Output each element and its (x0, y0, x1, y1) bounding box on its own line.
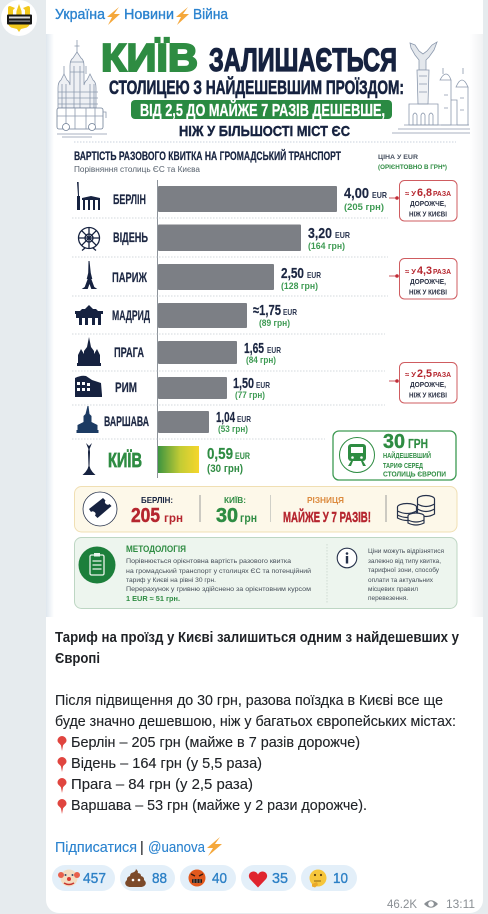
post headline (55, 630, 459, 667)
illustration: church and bus (57, 40, 107, 137)
callout: cheapest fare: НАЙДЕШЕВШИЙ (383, 451, 431, 460)
callout: 6.8 times: РАЗА (433, 189, 452, 198)
chart legend: (ОРІЄНТОВНО В ГРН*) (378, 165, 447, 171)
row: Rome: РИМ (115, 379, 137, 395)
reaction: clown 457 (52, 865, 115, 891)
row: Paris: ПАРИЖ (112, 269, 147, 285)
info note (368, 547, 444, 602)
title: Kyiv: КИЇВ (101, 37, 198, 80)
row: Madrid: EUR (283, 307, 297, 317)
info note: перевезення. (368, 595, 408, 602)
row: Berlin: (205 грн) (344, 202, 384, 213)
callout: 6.8 times: ДОРОЖЧЕ, (410, 199, 446, 208)
row: Prague (77, 337, 281, 366)
callout: cheapest fare: СТОЛИЦЬ ЄВРОПИ (383, 470, 446, 478)
panel: comparison: грн (164, 511, 183, 525)
panel: methodology (74, 538, 457, 608)
row: Kyiv: КИЇВ (108, 449, 142, 472)
callout: 2.5 times (389, 362, 457, 403)
channel name (55, 7, 229, 25)
row: Madrid (75, 303, 297, 329)
row: Vienna: (164 грн) (308, 241, 345, 252)
illustration: Kyiv monument and cathedral (392, 42, 470, 133)
row: Kyiv (82, 443, 250, 475)
row: Prague: 1,65 (244, 341, 264, 357)
row: Berlin: БЕРЛІН (113, 191, 146, 207)
callout: 4.3 times: НІЖ У КИЄВІ (409, 288, 447, 296)
post headline: Європі (55, 651, 100, 667)
title: remains: ЗАЛИШАЄТЬСЯ (209, 42, 397, 78)
callout: 4.3 times: 4,3 (417, 265, 432, 277)
callout: 4.3 times: ДОРОЖЧЕ, (410, 277, 446, 286)
methodology text: Порівнюється орієнтовна вартість разового квитка (126, 557, 291, 565)
reaction: heart 35: 35 (272, 871, 288, 887)
post headline: Тариф на проїзд у Києві залишиться одним з найдешевших у (55, 630, 459, 646)
row: Prague: ПРАГА (114, 344, 144, 360)
icon: ticket (83, 492, 117, 526)
green headline pill: ВІД 2,5 ДО МАЙЖЕ 7 РАЗІВ ДЕШЕВШЕ, (140, 99, 385, 120)
callout: 6.8 times (389, 180, 457, 221)
row: Vienna (78, 224, 350, 252)
row: Vienna: EUR (335, 230, 350, 240)
callout: 4.3 times: РАЗА (433, 267, 452, 276)
reaction: poop 88: 88 (152, 871, 167, 887)
row: Warsaw: EUR (237, 414, 251, 424)
row: Warsaw: ВАРШАВА (104, 413, 149, 429)
row: Madrid: (89 грн) (259, 318, 290, 329)
row: Rome (75, 376, 270, 401)
info note: тарифної зони, способу (368, 566, 440, 574)
list item: Prague: Прага – 84 грн (у 2,5 раза) (71, 777, 253, 793)
panel: comparison: 30 (216, 505, 238, 527)
reaction: thinking face 10: 10 (333, 871, 348, 887)
callout: 2.5 times: НІЖ У КИЄВІ (409, 390, 447, 400)
reactions (52, 865, 357, 891)
view count and time: 13:11 (446, 897, 475, 911)
panel: comparison: 205 (131, 505, 160, 527)
panel: comparison: грн (240, 511, 257, 525)
callout: 6.8 times: ≈ У (405, 189, 416, 198)
chart heading: ВАРТІСТЬ РАЗОВОГО КВИТКА НА ГРОМАДСЬКИЙ ТРАНСПОРТ (74, 150, 341, 163)
row: Prague: EUR (267, 345, 281, 355)
row: Paris (82, 261, 321, 292)
infographic image (46, 34, 483, 617)
bar chart (72, 180, 388, 478)
subscribe link: @uanova (148, 840, 206, 856)
reaction: clown 457: 457 (83, 871, 106, 887)
callout: cheapest fare: 30 (383, 431, 405, 453)
info note: оплати та актуальних (368, 577, 434, 584)
icon: coins (398, 496, 434, 525)
reaction: poop 88 (120, 865, 175, 891)
subscribe link: | (140, 840, 144, 856)
reaction: angry face 40 (180, 865, 236, 891)
callout: 2.5 times: 2,5 (417, 368, 432, 380)
row: Vienna: 3,20 (308, 226, 332, 242)
callout: cheapest fare: ГРН (408, 436, 428, 451)
methodology text: Перерахунок у гривню здійснено за орієнтовним курсом (126, 585, 311, 593)
row: Rome: (77 грн) (235, 390, 265, 401)
methodology text (126, 557, 311, 603)
panel: comparison: БЕРЛІН: (141, 495, 173, 505)
subscribe link (55, 837, 222, 856)
reaction: heart 35 (241, 865, 296, 891)
methodology text: 1 EUR ≈ 51 грн. (126, 594, 180, 603)
methodology text: на громадський транспорт у столицях ЄС та потенційний (126, 567, 311, 575)
list item: Vienna: Відень – 164 грн (у 5,5 раза) (71, 756, 262, 772)
icon: eye (424, 900, 438, 908)
chart legend: ЦІНА У EUR (378, 154, 418, 161)
info note: місцевих правил (368, 585, 418, 593)
channel name: Україна (55, 7, 106, 23)
info note: Ціни можуть відрізнятися (368, 547, 444, 555)
row: Warsaw (76, 406, 251, 435)
callout: 2.5 times: ДОРОЖЧЕ, (410, 380, 446, 389)
list item: Berlin: Берлін – 205 грн (майже в 7 разів дорожче) (71, 735, 360, 751)
row: Paris: EUR (307, 270, 321, 280)
row: Berlin (77, 182, 387, 213)
list item: Warsaw: Варшава – 53 грн (майже у 2 рази дорожче). (71, 798, 367, 814)
row: Paris: (128 грн) (281, 281, 318, 292)
panel: comparison: КИЇВ: (224, 495, 246, 505)
channel name: Новини (124, 7, 174, 23)
icon: metro train (340, 438, 374, 472)
icon: clipboard (78, 546, 116, 584)
callout: cheapest fare (333, 431, 456, 480)
callout: 2.5 times: ≈ У (405, 370, 416, 379)
row: Paris: 2,50 (281, 266, 304, 282)
callout: 6.8 times: 6,8 (417, 187, 432, 199)
row: Rome: 1,50 (233, 376, 254, 392)
view count and time: 46.2K (387, 897, 417, 911)
chart heading: Порівняння столиць ЄС та Києва (74, 165, 201, 174)
callout: 6.8 times: НІЖ У КИЄВІ (409, 210, 447, 218)
row: Rome: EUR (256, 380, 270, 390)
panel: comparison (74, 486, 457, 532)
chart legend (378, 154, 447, 171)
reaction: thinking face 10 (301, 865, 357, 891)
row: Berlin: EUR (372, 190, 387, 200)
row: Berlin: 4,00 (344, 186, 369, 202)
reaction: angry face 40: 40 (212, 871, 227, 887)
row: Warsaw: 1,04 (216, 410, 235, 426)
row: Prague: (84 грн) (246, 355, 276, 366)
row: Kyiv: 0,59 (207, 446, 233, 463)
callout: cheapest fare: ТАРИФ СЕРЕД (383, 461, 423, 470)
callout: 2.5 times: РАЗА (433, 370, 452, 379)
title (101, 37, 404, 140)
methodology text: тариф у Києві на рівні 30 грн. (126, 576, 216, 584)
icon: info (337, 548, 357, 568)
row: Kyiv: (30 грн) (207, 463, 243, 475)
panel: methodology: МЕТОДОЛОГІЯ (126, 544, 186, 555)
post intro text: буде значно дешевшою, ніж у багатьох європейських містах: (55, 714, 456, 730)
green headline pill (131, 99, 392, 120)
row: Vienna: ВІДЕНЬ (113, 229, 148, 245)
post intro text (55, 693, 456, 730)
post list (58, 735, 367, 814)
panel: comparison: МАЙЖЕ У 7 РАЗІВ! (283, 508, 371, 526)
info note: залежно від типу квитка, (368, 557, 441, 565)
view count and time (387, 897, 475, 911)
chart heading (74, 150, 341, 174)
callout: 4.3 times: ≈ У (405, 267, 416, 276)
callout: 4.3 times (389, 258, 457, 299)
row: Kyiv: EUR (235, 451, 250, 461)
row: Warsaw: (53 грн) (218, 424, 248, 435)
subscribe link: Підписатися (55, 840, 137, 856)
row: Madrid: ≈1,75 (253, 303, 281, 319)
channel avatar (1, 0, 37, 36)
row: Madrid: МАДРИД (112, 307, 150, 323)
channel name: Війна (193, 7, 229, 23)
panel: comparison: РІЗНИЦЯ (307, 495, 344, 505)
post intro text: Після підвищення до 30 грн, разова поїздка в Києві все ще (55, 693, 443, 709)
title: last line: НІЖ У БІЛЬШОСТІ МІСТ ЄС (179, 123, 350, 140)
